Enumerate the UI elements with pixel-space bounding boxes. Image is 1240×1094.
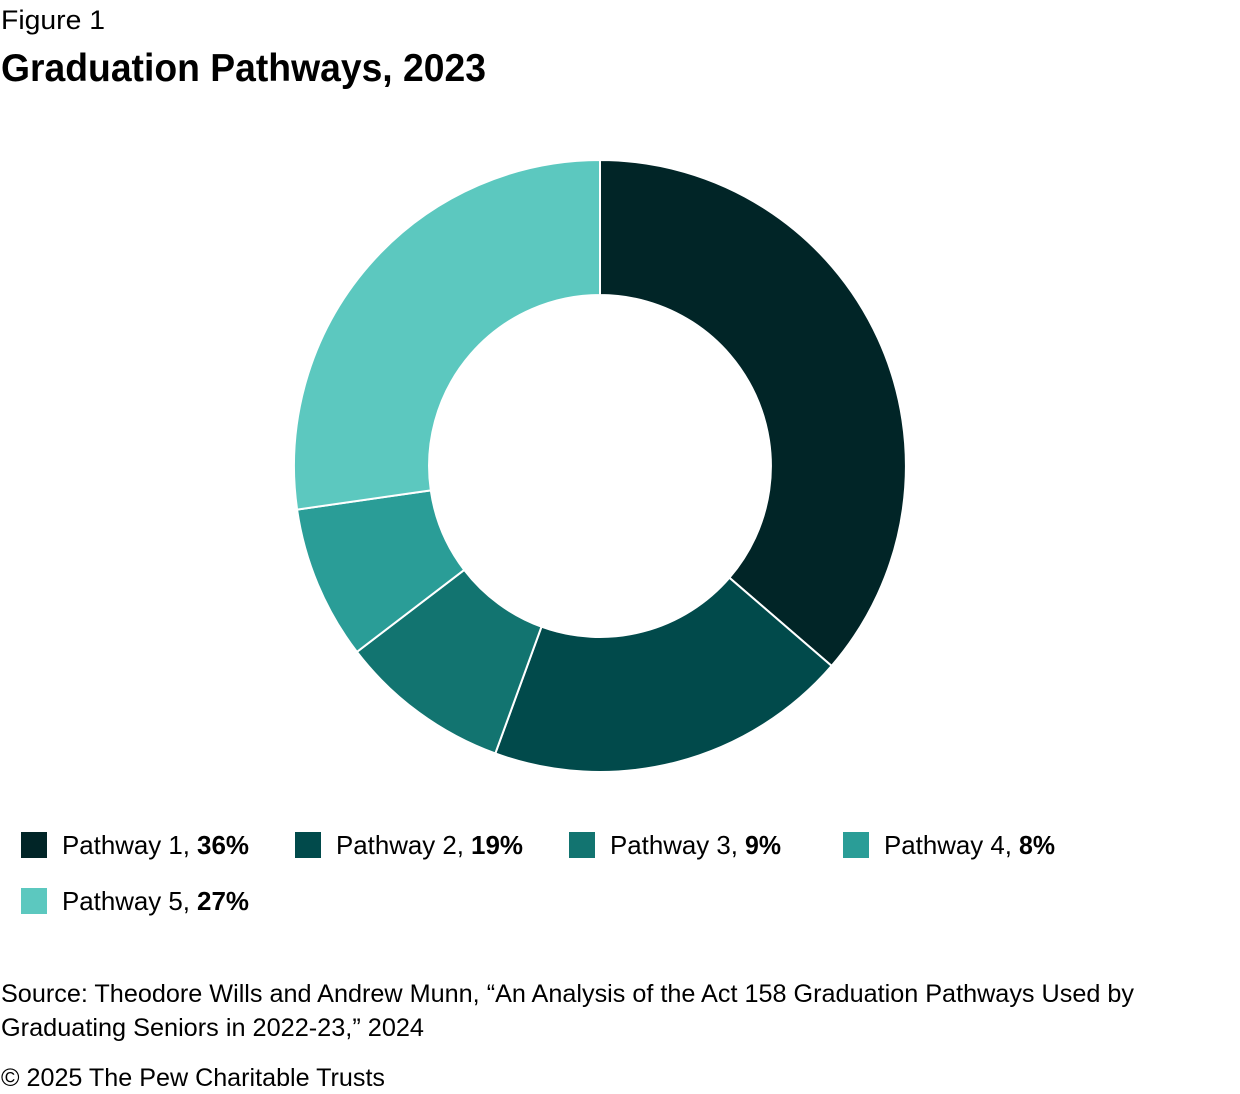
segment: Pathway 5, 27% (294, 160, 600, 510)
legend item: Pathway 4: 8% (1019, 830, 1055, 860)
segment: Pathway 2, 19% (495, 578, 832, 772)
legend (21, 830, 1055, 916)
legend item: Pathway 3 (569, 830, 781, 860)
legend item: Pathway 4: Pathway 4, (884, 830, 1012, 860)
legend item: Pathway 3: 9% (745, 830, 781, 860)
segment: Pathway 1, 36% (600, 160, 906, 666)
legend item: Pathway 1 (21, 830, 249, 860)
legend item: Pathway 5: Pathway 5, (62, 886, 190, 916)
source note: Source: Theodore Wills and Andrew Munn, “An Analysis of the Act 158 Graduation Pathways Used by (1, 980, 1134, 1008)
legend item: Pathway 5: 27% (197, 886, 249, 916)
title: Graduation Pathways, 2023 (1, 47, 486, 90)
segment: Pathway 4, 8% (297, 490, 464, 652)
segment: Pathway 3, 9% (357, 570, 542, 754)
legend item: Pathway 3: Pathway 3, (610, 830, 738, 860)
figure label: Figure 1 (1, 5, 105, 35)
legend item: Pathway 2: Pathway 2, (336, 830, 464, 860)
source note: Graduating Seniors in 2022-23,” 2024 (1, 1014, 424, 1042)
legend item: Pathway 5 (21, 886, 249, 916)
legend item: Pathway 2 (295, 830, 523, 860)
legend item: Pathway 1: 36% (197, 830, 249, 860)
copyright: © 2025 The Pew Charitable Trusts (1, 1064, 385, 1092)
source note (1, 980, 1134, 1042)
legend item: Pathway 2: 19% (471, 830, 523, 860)
donut chart (294, 160, 906, 772)
legend item: Pathway 1: Pathway 1, (62, 830, 190, 860)
legend item: Pathway 4 (843, 830, 1055, 860)
